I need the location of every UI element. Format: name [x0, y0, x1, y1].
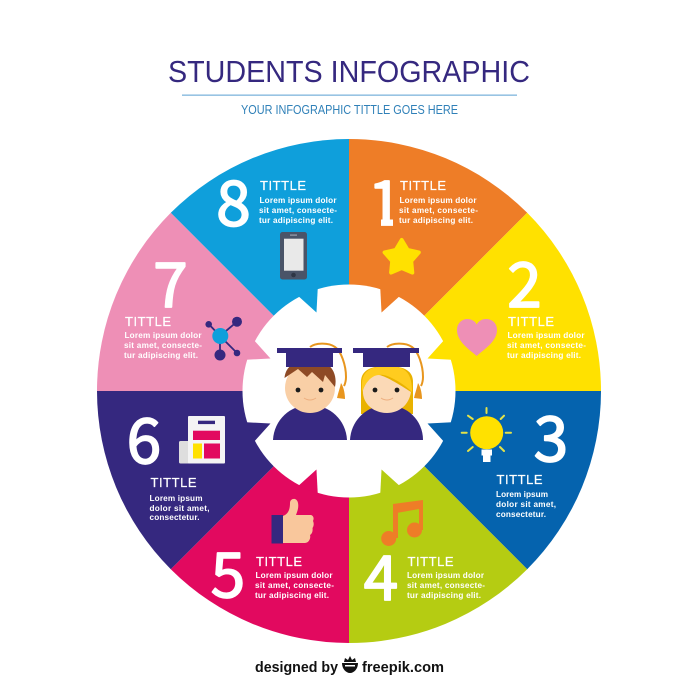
icon: newspaper — [179, 416, 225, 464]
title: STUDENTS INFOGRAPHIC — [168, 55, 530, 89]
text block 2: sit amet, consecte- — [507, 341, 586, 350]
item 1 — [374, 180, 478, 275]
text block 4: Lorem ipsum dolor — [407, 571, 485, 580]
panel: segment 6 indigo — [97, 391, 349, 569]
panel: segment 3 blue — [349, 391, 601, 569]
item 2 — [457, 235, 586, 360]
subtitle: YOUR INFOGRAPHIC TITTLE GOES HERE — [241, 102, 458, 117]
number 6: 6 — [127, 391, 161, 481]
text block 2: Lorem ipsum dolor — [508, 331, 585, 340]
text block 8: sit amet, consecte- — [259, 206, 337, 215]
icon: network — [205, 317, 242, 360]
text block 7: sit amet, consecte- — [124, 341, 202, 350]
panel: segment 5 crimson — [171, 391, 349, 643]
text block 1: sit amet, consecte- — [399, 206, 478, 215]
item 6 — [127, 391, 225, 522]
heading 2: TITTLE — [508, 314, 554, 329]
text block 6: dolor sit amet, — [150, 504, 210, 513]
white gear centre — [242, 284, 456, 498]
text block 8: tur adipiscing elit. — [259, 216, 333, 225]
item 7 — [124, 235, 242, 360]
text block 5: tur adipiscing elit. — [255, 591, 329, 600]
icon: boy graduate — [273, 344, 347, 440]
text block 5: sit amet, consecte- — [255, 581, 334, 590]
heading 3: TITTLE — [496, 472, 543, 487]
number 2: 2 — [507, 235, 542, 325]
text block 3: consectetur. — [496, 510, 546, 519]
footer credit: freepik.com — [362, 660, 444, 676]
number 1: 1 — [368, 153, 402, 243]
number 7: 7 — [153, 235, 188, 325]
icon: freepik logo — [342, 656, 358, 673]
item 8 — [216, 154, 337, 280]
text block 7: tur adipiscing elit. — [124, 351, 198, 360]
heading 8: TITTLE — [260, 178, 306, 193]
panel: segment 7 pink — [97, 213, 349, 391]
icon: music note — [381, 500, 423, 546]
text block 6: Lorem ipsum — [150, 494, 202, 503]
heading 7: TITTLE — [125, 314, 171, 329]
number 4: 4 — [364, 528, 398, 618]
text block 7: Lorem ipsum dolor — [124, 331, 202, 340]
text block 6: consectetur. — [150, 513, 200, 522]
panel: segment 1 orange — [349, 139, 527, 391]
icon: heart — [457, 319, 497, 356]
item 4 — [364, 500, 485, 618]
number 3: 3 — [534, 389, 568, 479]
icon: girl graduate — [350, 344, 423, 440]
icon: star — [385, 240, 419, 273]
item 3 — [462, 389, 568, 519]
panel: segment 8 sky blue — [171, 139, 349, 391]
icon: smartphone — [280, 232, 307, 280]
heading 4: TITTLE — [408, 554, 454, 569]
footer credit: designed by — [255, 660, 338, 676]
heading 1: TITTLE — [400, 178, 446, 193]
circular wheel — [97, 139, 601, 643]
text block 5: Lorem ipsum dolor — [256, 571, 333, 580]
heading 5: TITTLE — [256, 554, 302, 569]
number 8: 8 — [216, 154, 251, 244]
panel: segment 2 yellow — [349, 213, 601, 391]
text block 8: Lorem ipsum dolor — [260, 196, 337, 205]
text block 3: dolor sit amet, — [496, 500, 556, 509]
text block 3: Lorem ipsum — [496, 490, 548, 499]
number 5: 5 — [211, 525, 245, 615]
icon: thumbs up — [272, 499, 314, 544]
panel: segment 4 lime — [349, 391, 527, 643]
heading 6: TITTLE — [150, 475, 197, 490]
text block 4: tur adipiscing elit. — [407, 591, 481, 600]
text block 1: Lorem ipsum dolor — [400, 196, 477, 205]
icon: light bulb — [462, 408, 511, 462]
item 5 — [211, 499, 334, 615]
text block 1: tur adipiscing elit. — [399, 216, 473, 225]
footer credit — [255, 656, 444, 676]
text block 4: sit amet, consecte- — [407, 581, 485, 590]
text block 2: tur adipiscing elit. — [507, 351, 581, 360]
